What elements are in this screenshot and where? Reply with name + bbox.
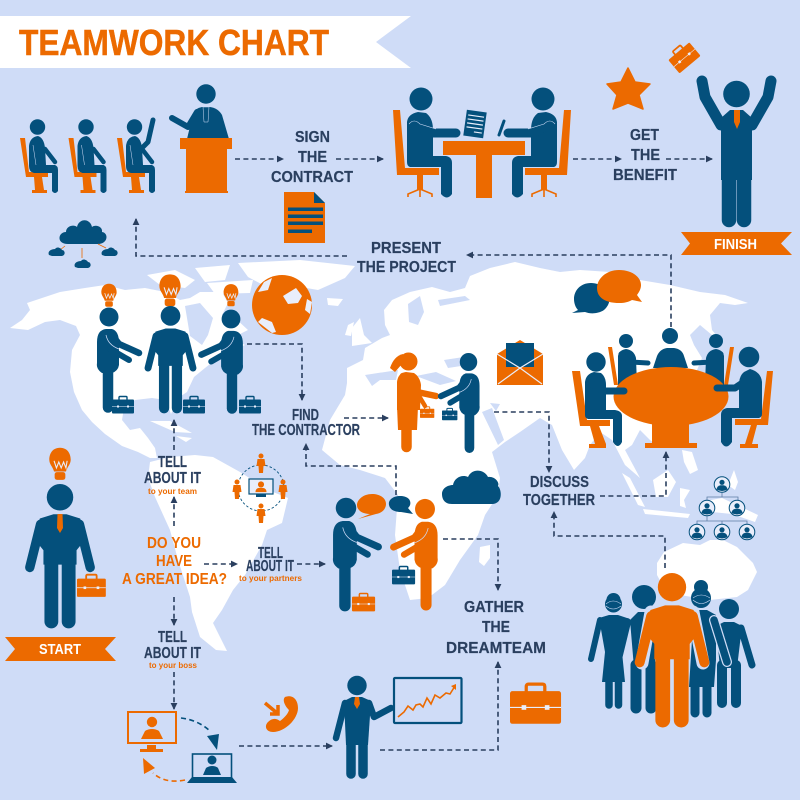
present the project text: THE PROJECT [357, 259, 456, 276]
table [614, 367, 728, 448]
arrow: idea to tell team [173, 497, 175, 526]
tell partners text: to your partners [239, 574, 303, 583]
start man [30, 484, 106, 622]
arrow: handshake to discuss [494, 412, 549, 472]
sign the contract text: THE [298, 149, 327, 166]
back centre man [653, 328, 688, 368]
speech bubble navy [389, 496, 413, 514]
presenter [336, 676, 402, 774]
dream team group [591, 573, 752, 720]
icon: phone [265, 696, 298, 732]
tell boss text: ABOUT IT [144, 645, 201, 662]
icon: video call boss monitor [128, 712, 176, 752]
finish man with raised arms [702, 81, 771, 220]
tell partners text: ABOUT IT [246, 558, 294, 575]
tell boss text: TELL [158, 629, 187, 646]
find the contractor text: FIND [292, 407, 319, 424]
get the benefit text: BENEFIT [613, 167, 677, 184]
start bulb [49, 448, 71, 480]
speech bubble orange [357, 494, 386, 519]
sign the contract text: CONTRACT [271, 169, 353, 186]
podium [180, 138, 232, 193]
great idea question [122, 535, 227, 588]
gather the dreamteam text: GATHER [464, 599, 524, 616]
tell team text: ABOUT IT [144, 470, 201, 487]
icon: thrown briefcase [666, 39, 701, 73]
raised hand [140, 120, 153, 150]
briefcases [112, 396, 134, 414]
finish ribbon [681, 232, 792, 255]
arrow: meeting to present [467, 255, 671, 327]
finish ribbon: FINISH [714, 237, 757, 253]
orange leader halo [642, 612, 703, 663]
arrow: idea to tell boss [173, 597, 175, 625]
discuss together text: TOGETHER [523, 492, 595, 509]
orange leader [640, 573, 704, 720]
briefcase [77, 575, 106, 597]
arrow: team to find [247, 344, 302, 400]
icon: cloud network [49, 220, 118, 268]
discuss together text [523, 474, 595, 509]
start ribbon [5, 637, 116, 661]
great idea question: A GREAT IDEA? [122, 571, 227, 588]
paper [463, 110, 487, 138]
present the project text: PRESENT [371, 240, 441, 257]
great idea question: DO YOU [147, 535, 201, 552]
sign the contract text [271, 129, 353, 186]
get the benefit text: GET [630, 127, 659, 144]
trend line [398, 686, 455, 717]
discuss together text: DISCUSS [530, 474, 589, 491]
team of three in North America [97, 306, 261, 414]
icon: cloud [442, 471, 501, 504]
chart board [394, 678, 462, 723]
arrow: idea to tell partners [204, 563, 237, 565]
title text: TEAMWORK CHART [19, 22, 329, 63]
arrow: find to handshake [344, 417, 388, 419]
sign the contract text: SIGN [295, 129, 330, 146]
man far right [716, 599, 752, 703]
present the project text [357, 240, 456, 276]
front left chair [572, 371, 610, 448]
get the benefit text: THE [631, 147, 660, 164]
tell team text [144, 454, 201, 496]
gather the dreamteam text [446, 599, 546, 657]
audience in chairs [20, 119, 155, 193]
icon: organisation chart [689, 477, 755, 540]
arrow: table to benefit [573, 158, 621, 160]
icon: globe [252, 275, 312, 335]
gather the dreamteam text: DREAMTEAM [446, 640, 546, 657]
icon: envelope [497, 340, 543, 385]
handshake with woman, centre [390, 352, 480, 448]
two people signing at a table [393, 88, 571, 198]
woman left [591, 593, 627, 705]
back left man [618, 334, 648, 385]
front left man [585, 352, 624, 446]
table [443, 141, 525, 198]
world map [10, 260, 758, 651]
arrow: benefit to finish [666, 158, 712, 160]
find the contractor text [252, 407, 360, 439]
front right chair [735, 371, 773, 448]
map seas [185, 296, 504, 445]
icon: team around monitor [232, 454, 288, 523]
tell boss text [144, 629, 201, 670]
tell partners text [239, 545, 303, 583]
navy man [441, 353, 480, 448]
arrow: podium to sign [235, 158, 283, 160]
great idea question: HAVE [156, 553, 192, 570]
tell boss text: to your boss [149, 660, 197, 670]
icon: laptop [187, 754, 237, 783]
front right man [717, 347, 762, 446]
arrow: presenter to dreamteam [380, 662, 498, 750]
title banner [0, 16, 411, 68]
arrow: discuss to meeting [600, 452, 666, 496]
handshake, bottom pair [333, 494, 438, 611]
arrow: tell to team [173, 420, 175, 450]
icon: star [607, 68, 650, 109]
arrow: sign to table [336, 158, 383, 160]
arrow: present to audience [136, 219, 347, 256]
gather the dreamteam text: THE [482, 619, 510, 636]
tell partners text: TELL [258, 545, 283, 562]
get the benefit text [613, 127, 677, 184]
back right man [694, 334, 724, 385]
tell team text: to your team [148, 486, 197, 496]
icon: speech bubbles [572, 270, 642, 313]
find the contractor text: THE CONTRACTOR [252, 422, 360, 439]
woman [390, 352, 436, 447]
arrow: pair to dreamteam [443, 539, 498, 590]
arrow: tell partners to pair [297, 563, 325, 565]
curved arrow to laptop [181, 718, 219, 750]
arrow: dreamteam to discuss [554, 512, 665, 568]
arrow: partners to find [306, 444, 396, 495]
round table meeting [572, 328, 773, 448]
arrow: laptop to presenter [239, 745, 332, 747]
icon: orange briefcase large [510, 684, 561, 724]
woman right [689, 580, 727, 713]
speaker at podium [172, 84, 232, 193]
arrow: tell boss to monitor [173, 672, 175, 709]
icon: document [284, 192, 325, 243]
man second left [617, 585, 656, 708]
start ribbon: START [39, 642, 81, 658]
back chairs [608, 347, 734, 385]
pen [499, 121, 504, 135]
tell team text: TELL [158, 454, 187, 471]
curved arrow to monitor [143, 758, 185, 781]
light bulbs over team [101, 274, 238, 307]
